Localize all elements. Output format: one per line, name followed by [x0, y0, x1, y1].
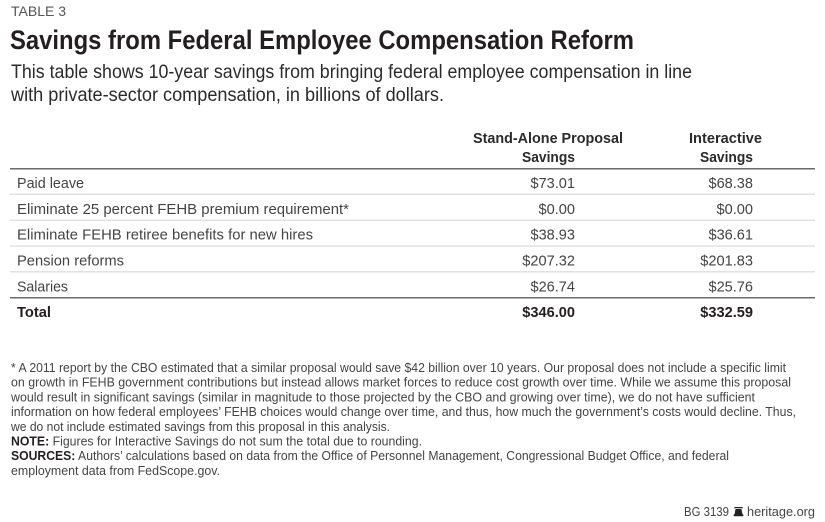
- sources: [11, 449, 729, 478]
- sources: employment data from FedScope.gov.: [11, 464, 220, 478]
- row: pension reforms: [17, 252, 753, 270]
- row: eliminate FEHB retiree benefits: [17, 226, 753, 244]
- row: total: [17, 304, 753, 321]
- sources: SOURCES: Authors’ calculations based on data from the Office of Personnel Management, Congressional Budget Office, and federal: [11, 449, 729, 463]
- row: eliminate FEHB retiree benefits: $36.61: [708, 226, 753, 244]
- row: eliminate FEHB retiree benefits: $38.93: [530, 226, 575, 244]
- row: eliminate 25 percent FEHB premium requirement: $0.00: [716, 201, 753, 218]
- row: paid leave: $73.01: [530, 175, 575, 192]
- footer: report number and source: BG 3139: [684, 504, 729, 519]
- column header: interactive savings: Savings: [700, 149, 753, 166]
- row: salaries: [17, 278, 753, 295]
- row: total: Total: [17, 304, 51, 321]
- column header: interactive savings: [689, 130, 762, 166]
- row: paid leave: [17, 175, 753, 192]
- row: paid leave: $68.38: [708, 175, 753, 192]
- row: total: $346.00: [522, 304, 575, 321]
- row: eliminate FEHB retiree benefits: Eliminate FEHB retiree benefits for new hires: [17, 226, 313, 244]
- title: Savings from Federal Employee Compensation Reform: [10, 25, 634, 55]
- table label: TABLE 3: [11, 3, 66, 19]
- row: pension reforms: $201.83: [700, 252, 753, 270]
- footnote: [10, 361, 796, 434]
- table: [10, 130, 815, 321]
- subtitle: with private-sector compensation, in billions of dollars.: [10, 84, 444, 106]
- icon: liberty bell: [734, 507, 743, 516]
- footer: report number and source: heritage.org: [747, 504, 815, 519]
- column header: stand-alone proposal savings: Stand-Alone Proposal: [473, 130, 623, 147]
- subtitle: [10, 61, 692, 106]
- row: total: $332.59: [700, 304, 753, 321]
- footer: report number and source: [684, 504, 815, 519]
- row: pension reforms: Pension reforms: [17, 252, 124, 270]
- footnote: on growth in FEHB government contributions but instead allows market forces to reduce cost growth over time. While we assume this proposal: [11, 376, 791, 390]
- footnote: we do not include estimated savings from this proposal in this analysis.: [10, 420, 390, 434]
- row: salaries: $25.76: [708, 278, 753, 295]
- row: eliminate 25 percent FEHB premium requirement: $0.00: [538, 201, 575, 218]
- row: paid leave: Paid leave: [17, 175, 84, 192]
- column header: stand-alone proposal savings: Savings: [522, 149, 575, 166]
- row: eliminate 25 percent FEHB premium requirement: Eliminate 25 percent FEHB premium requirement*: [17, 201, 349, 218]
- note: NOTE: Figures for Interactive Savings do not sum the total due to rounding.: [11, 434, 422, 448]
- row: pension reforms: $207.32: [522, 252, 575, 270]
- footnote: information on how federal employees’ FEHB choices would change over time, and thus, how much the government’s costs would decline. Thus,: [11, 405, 796, 419]
- footnote: would result in significant savings (similar in magnitude to those projected by the CBO and growing over time), we do not have sufficient: [10, 390, 756, 404]
- row: eliminate 25 percent FEHB premium requirement: [17, 201, 753, 218]
- column header: interactive savings: Interactive: [689, 130, 762, 147]
- column header: stand-alone proposal savings: [473, 130, 623, 166]
- row: salaries: $26.74: [530, 278, 575, 295]
- footnote: * A 2011 report by the CBO estimated that a similar proposal would save $42 billion over 10 years. Our proposal does not include a specific limit: [11, 361, 787, 375]
- row: salaries: Salaries: [17, 278, 68, 295]
- subtitle: This table shows 10-year savings from bringing federal employee compensation in line: [11, 61, 692, 83]
